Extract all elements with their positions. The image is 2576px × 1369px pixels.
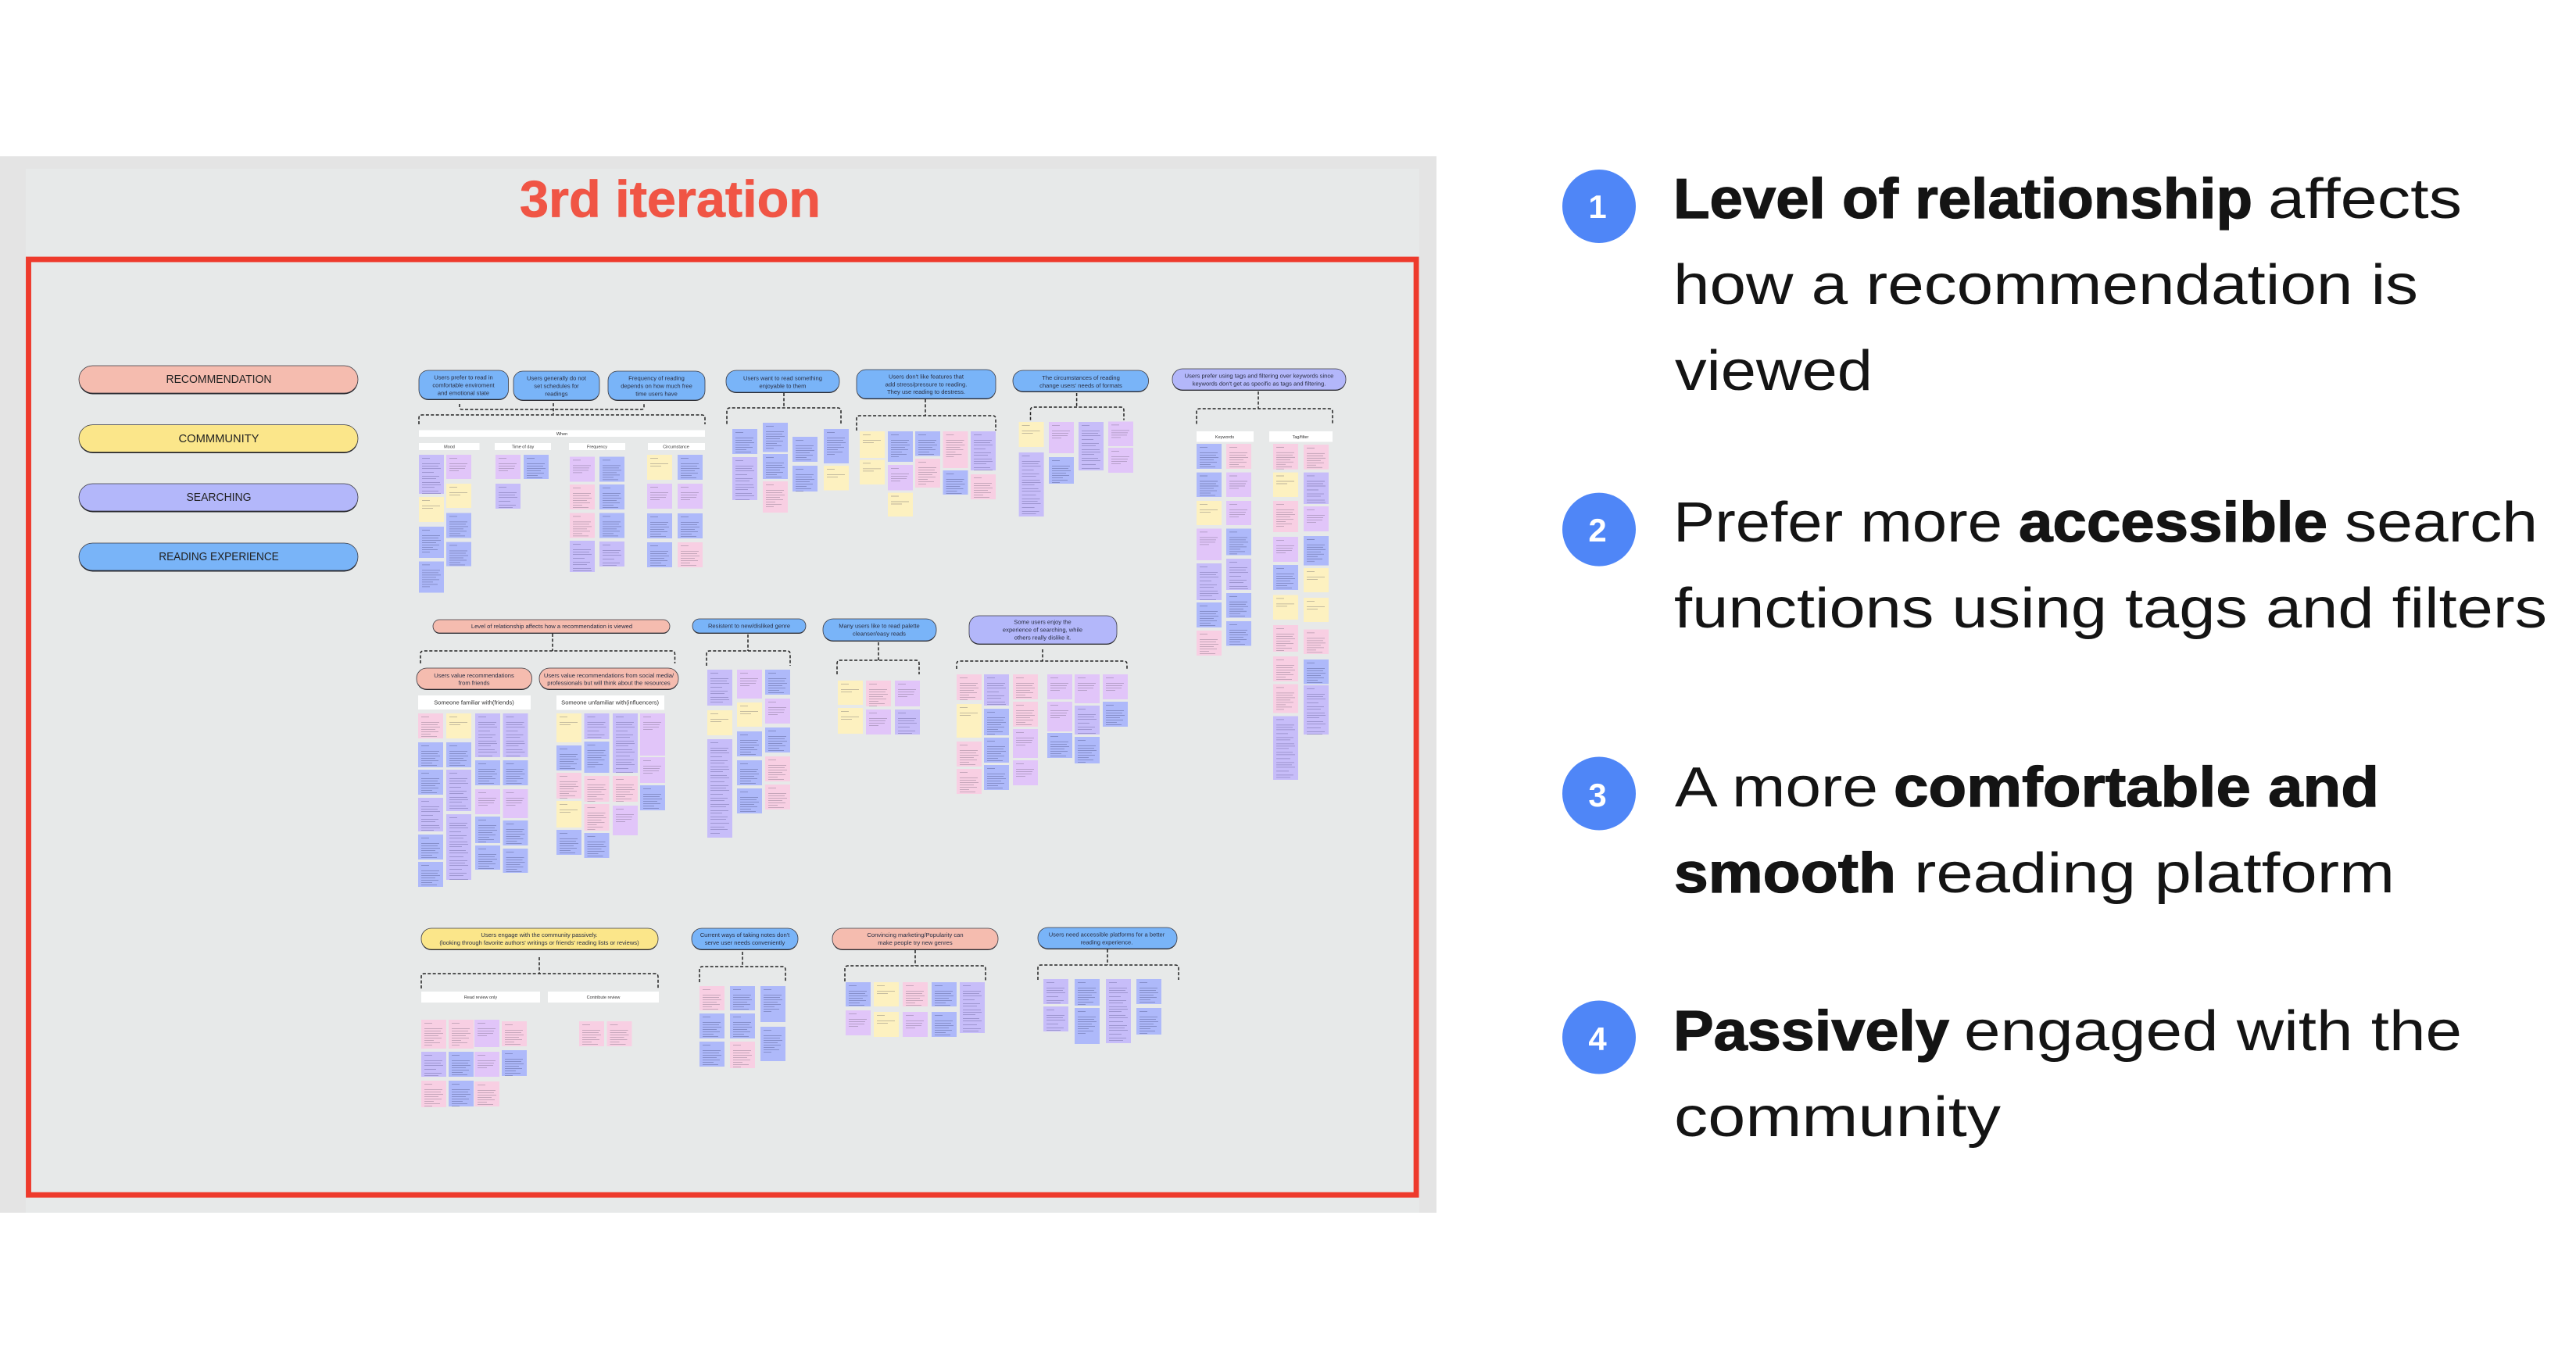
pill: social media — [539, 668, 678, 690]
pill: level of relationship: Level of relationship affects how a recommendation is viewed — [471, 623, 632, 630]
pill: taking notes — [692, 928, 798, 950]
header: contribute review — [548, 992, 659, 1003]
header: frequency: Frequency — [587, 445, 607, 450]
number badge 1: 1 — [1588, 188, 1607, 225]
connector and bracket — [957, 649, 1127, 669]
finding text 4: community — [1674, 1086, 2001, 1149]
pill: comfortable environment: and emotional state — [438, 389, 489, 397]
header: time of day — [495, 443, 551, 450]
pill: resistent — [692, 619, 806, 634]
finding text 1: affects — [2268, 168, 2462, 231]
cluster: enjoyable reading — [726, 370, 849, 513]
pill: no schedules: set schedules for — [534, 383, 579, 389]
number badge 3 — [1562, 756, 1636, 830]
finding text 2: functions using tags and filters — [1674, 577, 2547, 640]
pill: social media: Users value recommendations from social media/ — [544, 672, 674, 679]
header: keywords — [1197, 431, 1254, 442]
sticky notes: stress — [860, 431, 996, 517]
pill: passive engagement: Users engage with the community passively. — [481, 931, 598, 938]
panel: 3rd iteration affinity board — [0, 156, 1436, 1213]
header: read review only: Read review only — [464, 995, 497, 1000]
pill: stress — [857, 370, 996, 399]
finding text 2: accessible — [2019, 491, 2327, 554]
header: mood — [419, 443, 480, 450]
number badge 3: 3 — [1588, 777, 1607, 813]
sticky notes: contribute review — [579, 1021, 631, 1046]
pill: convincing marketing: make people try new genres — [878, 939, 953, 946]
connector and bracket — [845, 950, 986, 981]
pill: frequency of reading: time users have — [635, 391, 678, 397]
finding text 2: search — [2345, 491, 2538, 554]
finding text 2: Prefer more — [1673, 491, 2002, 554]
legend pill: reading experience — [79, 543, 358, 572]
finding text 2 — [1673, 491, 2547, 640]
pill: experience of searching: others really dislike it. — [1014, 634, 1071, 642]
connector and bracket — [857, 399, 996, 431]
finding text 3: reading platform — [1914, 842, 2395, 905]
red frame around the board — [28, 259, 1416, 1195]
finding 3: comfortable platform — [1562, 756, 2395, 905]
legend pill: searching: SEARCHING — [186, 491, 252, 504]
header: contribute review: Contribute review — [587, 995, 620, 1000]
pill: passive engagement: (looking through favorite authors' writings or friends' reading lists or reviews) — [439, 939, 639, 946]
pill: comfortable environment: Users prefer to read in — [434, 374, 493, 381]
pill: taking notes: serve user needs conveniently — [705, 939, 785, 946]
header: tag/filter: Tag/filter — [1293, 435, 1309, 440]
pill: level of relationship — [433, 620, 670, 634]
cluster: marketing and popularity — [832, 928, 998, 1037]
title: 3rd iteration: 3rd iteration — [520, 170, 821, 228]
header: circumstance — [648, 443, 705, 450]
sticky notes: when — [419, 455, 703, 592]
pill: tags and filtering: Users prefer using tags and filtering over keywords since — [1185, 372, 1333, 379]
finding text 3: comfortable and — [1894, 756, 2379, 819]
pill: comfortable environment — [419, 370, 508, 400]
finding text 1: how a recommendation is — [1673, 254, 2418, 316]
header: keywords: Keywords — [1215, 435, 1234, 440]
pill: enjoyable: enjoyable to them — [760, 382, 806, 389]
header: when — [419, 430, 705, 437]
pill: no schedules: Users generally do not — [527, 375, 587, 381]
cluster: when users read — [419, 370, 705, 592]
sticky notes: accessible platforms — [1043, 979, 1161, 1044]
pill: frequency of reading — [608, 371, 705, 401]
pill: accessible platforms — [1038, 928, 1177, 949]
pill: experience of searching — [969, 616, 1117, 645]
sticky notes: note taking — [699, 986, 785, 1068]
pill: palette cleanser: Many users like to read palette — [839, 623, 920, 630]
pill: stress: add stress/pressure to reading. — [886, 381, 967, 388]
cluster: experience of searching — [957, 616, 1128, 794]
sticky notes: familiar — [418, 713, 528, 887]
sticky notes: tags — [1197, 444, 1329, 780]
pill: circumstances: change users' needs of formats — [1039, 382, 1122, 389]
sticky notes: unfamiliar — [556, 713, 665, 858]
cluster: accessible platforms — [1038, 928, 1179, 1044]
number badge 4 — [1562, 1000, 1636, 1074]
connector and bracket — [699, 952, 785, 982]
header: mood: Mood — [444, 445, 455, 450]
cluster: passive community engagement — [421, 928, 659, 1107]
pill: convincing marketing: Convincing marketing/Popularity can — [867, 931, 964, 938]
pill: accessible platforms: Users need accessible platforms for a better — [1049, 931, 1165, 938]
connector and bracket — [837, 642, 919, 674]
cluster: level of relationship — [417, 620, 678, 887]
sticky notes: searching experience — [957, 674, 1128, 794]
pill: experience of searching: experience of searching, while — [1003, 627, 1082, 634]
legend pill: community: COMMMUNITY — [178, 433, 259, 445]
pill: tags and filtering — [1172, 369, 1346, 391]
finding 1: level of relationship — [1562, 168, 2462, 402]
header: circumstance: Circumstance — [663, 445, 689, 450]
number badge 1 — [1562, 170, 1636, 243]
pill: passive engagement — [421, 928, 658, 950]
finding text 4 — [1673, 1000, 2462, 1149]
legend pill: recommendation: RECOMMENDATION — [166, 374, 272, 386]
legend pill: reading experience: READING EXPERIENCE — [159, 551, 279, 563]
pill: friends: from friends — [458, 680, 490, 686]
connector and bracket — [1030, 393, 1124, 420]
pill: convincing marketing — [832, 928, 998, 950]
connector and bracket — [1197, 391, 1333, 424]
pill: stress: Users don't like features that — [889, 374, 964, 380]
finding text 3: A more — [1675, 756, 1878, 819]
pill: palette cleanser — [823, 619, 936, 642]
finding text 1: viewed — [1675, 340, 1873, 402]
sticky notes: resistent — [707, 670, 790, 838]
header: familiar — [418, 695, 531, 710]
sticky notes: palette cleanser — [838, 681, 920, 735]
sticky notes: read review only — [421, 1020, 527, 1107]
finding text 4: Passively — [1673, 1000, 1949, 1063]
pill: friends: Users value recommendations — [434, 672, 514, 679]
connector and bracket — [421, 957, 658, 988]
header: unfamiliar — [556, 695, 664, 710]
header: unfamiliar: Someone unfamiliar with(influencers) — [561, 699, 660, 706]
pill: circumstances: The circumstances of reading — [1042, 374, 1120, 381]
legend: theme categories — [79, 366, 358, 572]
finding text 1 — [1673, 168, 2462, 402]
header: frequency — [569, 443, 625, 450]
number badge 2 — [1562, 493, 1636, 567]
pill: no schedules: readings — [545, 391, 568, 397]
cluster: resistant to new genres — [692, 619, 806, 838]
finding text 3: smooth — [1674, 842, 1896, 905]
connector and bracket — [707, 634, 790, 666]
legend pill: recommendation — [79, 366, 358, 394]
pill: comfortable environment: comfortable enviroment — [432, 381, 496, 389]
finding text 4: engaged with the — [1964, 1000, 2462, 1063]
pill: stress: They use reading to destress. — [887, 388, 965, 395]
header: familiar: Someone familiar with(friends) — [434, 699, 514, 706]
finding text 1: Level of relationship — [1673, 168, 2252, 231]
connector: three pills merge — [460, 403, 644, 414]
sticky notes: marketing — [846, 982, 985, 1037]
header: when: When — [556, 432, 567, 437]
header: tag/filter — [1269, 431, 1333, 442]
pill: taking notes: Current ways of taking notes don't — [700, 931, 790, 938]
finding text 3 — [1674, 756, 2395, 905]
bracket — [419, 415, 705, 424]
finding 2: accessible search — [1562, 491, 2547, 640]
sticky notes: enjoyable — [732, 423, 849, 513]
legend pill: community — [79, 425, 358, 453]
sticky notes: circumstances — [1019, 422, 1133, 517]
cluster: palette cleanser — [823, 619, 936, 735]
pill: resistent: Resistent to new/disliked genre — [708, 623, 790, 630]
header: read review only — [421, 992, 540, 1003]
number badge 2: 2 — [1588, 512, 1607, 549]
cluster: tags versus keywords — [1172, 369, 1346, 780]
pill: enjoyable — [726, 370, 839, 393]
cluster: note taking — [692, 928, 798, 1068]
header: time of day: Time of day — [512, 445, 535, 450]
pill: tags and filtering: keywords don't get as specific as tags and filtering. — [1193, 380, 1326, 387]
number badge 4: 4 — [1588, 1020, 1607, 1057]
pill: palette cleanser: cleanser/easy reads — [853, 631, 906, 638]
pill: accessible platforms: reading experience. — [1081, 939, 1132, 946]
pill: frequency of reading: Frequency of reading — [628, 375, 685, 381]
finding 4: passive engagement — [1562, 1000, 2462, 1149]
pill: friends — [417, 668, 531, 690]
pill: frequency of reading: depends on how much free — [621, 383, 692, 389]
connector and bracket — [727, 393, 841, 424]
connector and bracket — [1038, 949, 1179, 980]
pill: social media: professionals but will think about the resources — [547, 680, 671, 686]
pill: enjoyable: Users want to read something — [743, 374, 822, 381]
pill: no schedules — [513, 371, 599, 401]
pill: experience of searching: Some users enjoy the — [1014, 619, 1072, 626]
connector and bracket — [420, 634, 675, 663]
pill: circumstances — [1013, 370, 1149, 392]
legend pill: searching — [79, 484, 358, 513]
cluster: stress and pressure — [857, 370, 996, 517]
cluster: circumstances and formats — [1013, 370, 1149, 517]
